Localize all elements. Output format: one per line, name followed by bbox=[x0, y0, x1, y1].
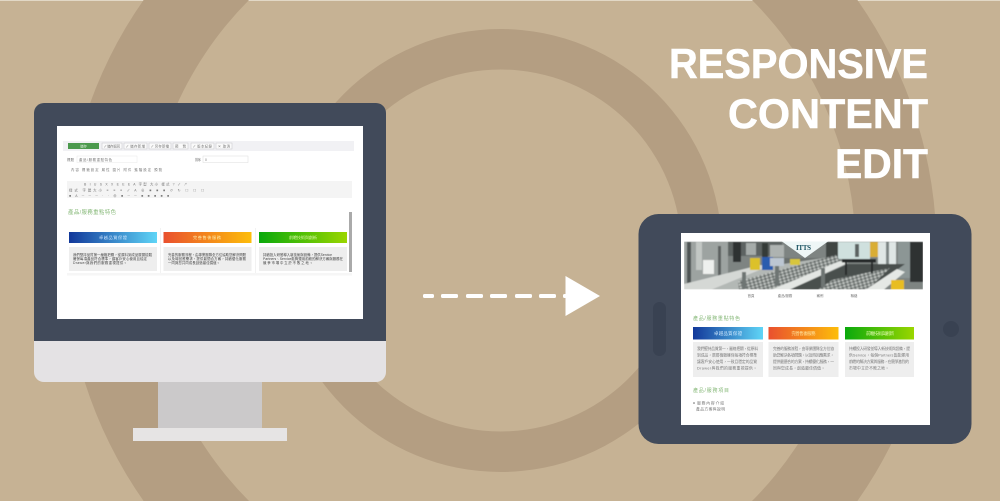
tablet bullet list: 產品方案與說明 bbox=[696, 406, 725, 412]
desktop card: green bbox=[259, 232, 347, 271]
editor action bar: ✓ 版本紀錄 bbox=[193, 144, 213, 148]
tablet body bbox=[638, 214, 972, 444]
banner nav labels: 首頁 bbox=[748, 293, 755, 298]
monitor stand bbox=[158, 382, 262, 429]
monitor base bbox=[133, 428, 287, 441]
title: CONTENT bbox=[728, 90, 928, 137]
tablet card: blue: 到成品，層層檢驗確保每項符合標準 bbox=[697, 352, 757, 358]
desktop card: green: 持續投入研發導入新技術與設備，提供Service bbox=[263, 252, 332, 257]
editor form fields: 內容 標籤設定 屬性 圖片 附件 進階設定 預覽 bbox=[71, 167, 163, 172]
tablet home button bbox=[943, 321, 959, 337]
desktop card: green: Partners、Service能夠運用前瞻的解決方案與服務在 bbox=[263, 256, 344, 261]
tablet left pill bbox=[653, 302, 666, 356]
tablet card: blue: 卓越品質保證 bbox=[714, 330, 743, 337]
desktop card: orange: 完善的服務流程，由專業團隊全方位協助您解決問題 bbox=[168, 252, 247, 257]
monitor screen bbox=[57, 126, 363, 319]
tablet card: orange: 同與您成長，創造最佳價值。 bbox=[773, 366, 825, 370]
tablet card: blue: 讓客戶安心使用，一致且穩定的品質 bbox=[697, 359, 757, 364]
tablet card: orange: 助您解決各項問題，以及時回應需求， bbox=[773, 352, 834, 358]
editor scrollbar bbox=[349, 212, 352, 272]
desktop monitor bbox=[34, 103, 386, 441]
monitor chin bbox=[34, 340, 386, 382]
desktop card: blue: 卓越品質保證 bbox=[99, 234, 128, 241]
logo notch bbox=[782, 242, 828, 258]
title bbox=[669, 40, 928, 187]
editor toolbar: 樣式 字體大小 ≡ ≡ ≡ ✓ A ⊕ ■ ■ ■ ↺ ↻ ☐ ☐ ☐ bbox=[69, 188, 204, 192]
tablet bbox=[638, 214, 972, 444]
tablet card: green bbox=[845, 327, 914, 377]
desktop card: orange: 一同與您共同成長創造最佳價值。 bbox=[168, 260, 220, 265]
desktop card: orange: 以及時回應需求，提供最適合方案，持續優化服務 bbox=[168, 256, 247, 261]
banner photo bbox=[684, 242, 923, 290]
editor form fields: 標題 bbox=[67, 157, 75, 162]
editor action bar: ✕ 取消 bbox=[218, 144, 231, 148]
editor form fields: 0 bbox=[205, 158, 207, 162]
tablet bullet list: 服務內容介紹 bbox=[697, 400, 724, 406]
tablet heading: features: 產品/服務重點特色 bbox=[693, 315, 740, 322]
editor action bar: ✓ 儲存返回 bbox=[104, 144, 121, 148]
tablet card: blue bbox=[693, 327, 763, 377]
editor toolbar bbox=[67, 181, 352, 198]
editor action bar: ✓ 另存新檔 bbox=[151, 144, 170, 148]
tablet card: orange: 完善售後服務 bbox=[792, 330, 816, 337]
title: RESPONSIVE bbox=[669, 40, 928, 87]
dashed arrow bbox=[423, 276, 600, 316]
desktop card: green: 前瞻技術與創新 bbox=[289, 234, 317, 241]
editor heading: 產品/服務重點特色 bbox=[68, 208, 117, 216]
tablet card: green: 前瞻技術與創新 bbox=[866, 330, 895, 337]
tablet card: blue: 我們堅持品質第一，嚴格把關，從原料 bbox=[697, 346, 758, 351]
editor form fields bbox=[67, 156, 248, 172]
editor toolbar: ■ A ─ ─ ─ · · ⊕ ■ ─ ─ ■ ■ ■ ■ ■ bbox=[69, 194, 169, 198]
desktop card: blue bbox=[69, 232, 157, 271]
desktop card: blue: 我們堅持品質第一嚴格把關，從原料到成品層層檢驗 bbox=[73, 252, 153, 257]
tablet card: green: 前瞻的解決方案與服務，在競爭激烈的 bbox=[849, 359, 909, 364]
tablet card: orange: 完善的服務流程，由專業團隊全方位協 bbox=[773, 346, 834, 351]
desktop card: orange: 完善售後服務 bbox=[193, 234, 222, 241]
desktop card: blue: Drawer與我們的服務重視提供。 bbox=[73, 260, 127, 265]
editor column rules bbox=[67, 228, 352, 276]
editor form fields: 產品/服務重點特色 bbox=[79, 157, 113, 162]
banner nav labels: 產品/服務 bbox=[778, 293, 793, 298]
editor toolbar: B I U S X X E E E A 字型 大小 樣式 ? ✓ ↗ bbox=[84, 182, 187, 186]
tablet screen bbox=[681, 233, 930, 425]
banner nav labels bbox=[748, 293, 858, 298]
tablet bullet list bbox=[693, 400, 725, 412]
banner nav labels: 聯絡 bbox=[851, 293, 858, 298]
monitor bezel bbox=[34, 103, 386, 341]
tablet heading: items: 產品/服務項目 bbox=[693, 387, 729, 394]
tablet card: green: 市場中立於不敗之地。 bbox=[849, 366, 889, 370]
tablet card: blue: Drawer與我們的服務重視提供。 bbox=[697, 366, 757, 370]
tablet card: green: 持續投入研發並導入新技術與設備，提 bbox=[849, 346, 910, 351]
tablet card: green: 供Service，每個Partners皆能運用 bbox=[849, 352, 909, 358]
title: EDIT bbox=[835, 140, 928, 187]
desktop card: green: 競爭市場中立於不敗之地。 bbox=[263, 260, 313, 265]
editor form fields: 排序 bbox=[195, 157, 202, 162]
editor action bar: 預覽 bbox=[175, 144, 187, 148]
tablet card: orange: 提供最適合的方案，持續優化服務，一 bbox=[773, 359, 834, 364]
banner nav labels: 案例 bbox=[817, 293, 824, 298]
desktop card: orange bbox=[164, 232, 252, 271]
tablet card: orange bbox=[768, 327, 838, 377]
editor action bar: ✓ 儲存新增 bbox=[126, 144, 146, 148]
editor action bar: 儲存 bbox=[80, 144, 87, 148]
desktop card: blue: 確保每項產品符合標準，讓客戶安心使用且穩定 bbox=[73, 256, 148, 261]
editor action bar bbox=[63, 141, 354, 151]
logo: ITTS bbox=[796, 244, 811, 252]
